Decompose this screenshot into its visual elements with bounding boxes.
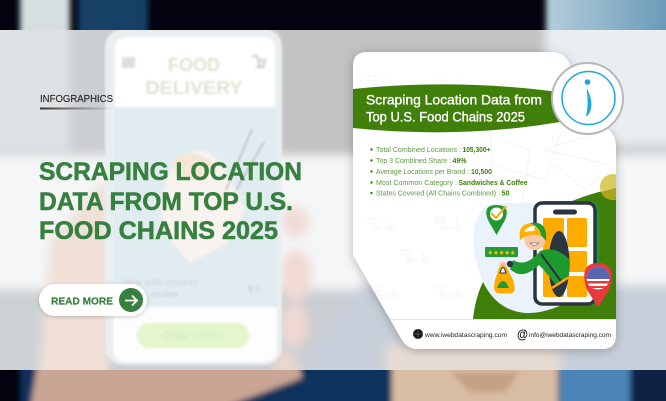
icon: arrow in circle [119, 288, 143, 312]
stat: most common category: Sandwiches & Coffee [458, 180, 528, 187]
label: infographics [40, 93, 113, 110]
yellow circle accent [600, 174, 616, 200]
phone mock-up label: food delivery: DELIVERY [146, 78, 242, 98]
footer contact: email: info@iwebdatascraping.com [529, 332, 611, 339]
courier body [500, 249, 569, 288]
faint map lines [490, 132, 610, 203]
icon: USA flag pin [584, 263, 612, 307]
stat: most common category [370, 180, 528, 187]
phone mock-up menu text: Order online [163, 330, 223, 342]
footer contact: website [413, 329, 507, 339]
pale blob backdrop [473, 203, 570, 313]
main heading: DATA FROM TOP U.S. [39, 188, 293, 216]
footer contact: email [517, 326, 611, 342]
green title banner: Scraping Location Data from [366, 92, 542, 108]
phone mock-up label: food delivery: FOOD [168, 55, 220, 75]
footer contact: website: www.iwebdatascraping.com [424, 332, 507, 339]
icon: location pin with check [486, 205, 507, 235]
green illustration backdrop [473, 188, 616, 319]
stat: total locations: Total Combined Locations : [376, 147, 461, 154]
phone mock-up menu text: Wok with chicken [124, 278, 198, 287]
dark oval portal [548, 231, 570, 297]
read more button [39, 284, 147, 316]
footer strip [390, 320, 616, 349]
rating stars: ★★★★★ [488, 249, 516, 257]
phone mock-up label: food delivery [146, 57, 242, 95]
illustration: delivery person in phone [473, 201, 612, 313]
stat: total locations: 105,300+ [462, 147, 490, 154]
phone mock-up menu text: noodles [150, 290, 178, 299]
phone [535, 201, 599, 305]
stat: average locations: 10,500 [471, 169, 492, 176]
stat: top 3 share: Top 3 Combined Share : [376, 158, 451, 165]
green title banner: Top U.S. Food Chains 2025 [366, 110, 525, 124]
phone mock-up menu text [124, 280, 260, 297]
main heading: SCRAPING LOCATION [39, 158, 302, 186]
stat: top 3 share: 49% [452, 158, 467, 165]
key statistics list [370, 147, 528, 198]
stat: most common category: Most Common Category : [376, 180, 457, 187]
footer contact: email: @ [517, 326, 528, 342]
stat: states covered: States Covered (All Chains Combined) : [376, 190, 500, 198]
logo badge [552, 63, 623, 134]
faint scooter watermarks [368, 76, 463, 299]
read more button: READ MORE [51, 296, 113, 308]
main heading: FOOD CHAINS 2025 [39, 217, 278, 245]
infographic card [353, 52, 626, 350]
phone mock-up menu text: $ 5 [248, 284, 261, 294]
courier head [520, 223, 546, 250]
green title banner [353, 84, 565, 132]
delivery bag [494, 265, 515, 294]
label: infographics: INFOGRAPHICS [40, 93, 113, 105]
stat: average locations: Average Locations per Brand : [376, 169, 469, 176]
stat: states covered: 50 [502, 190, 510, 198]
main heading [39, 158, 302, 245]
